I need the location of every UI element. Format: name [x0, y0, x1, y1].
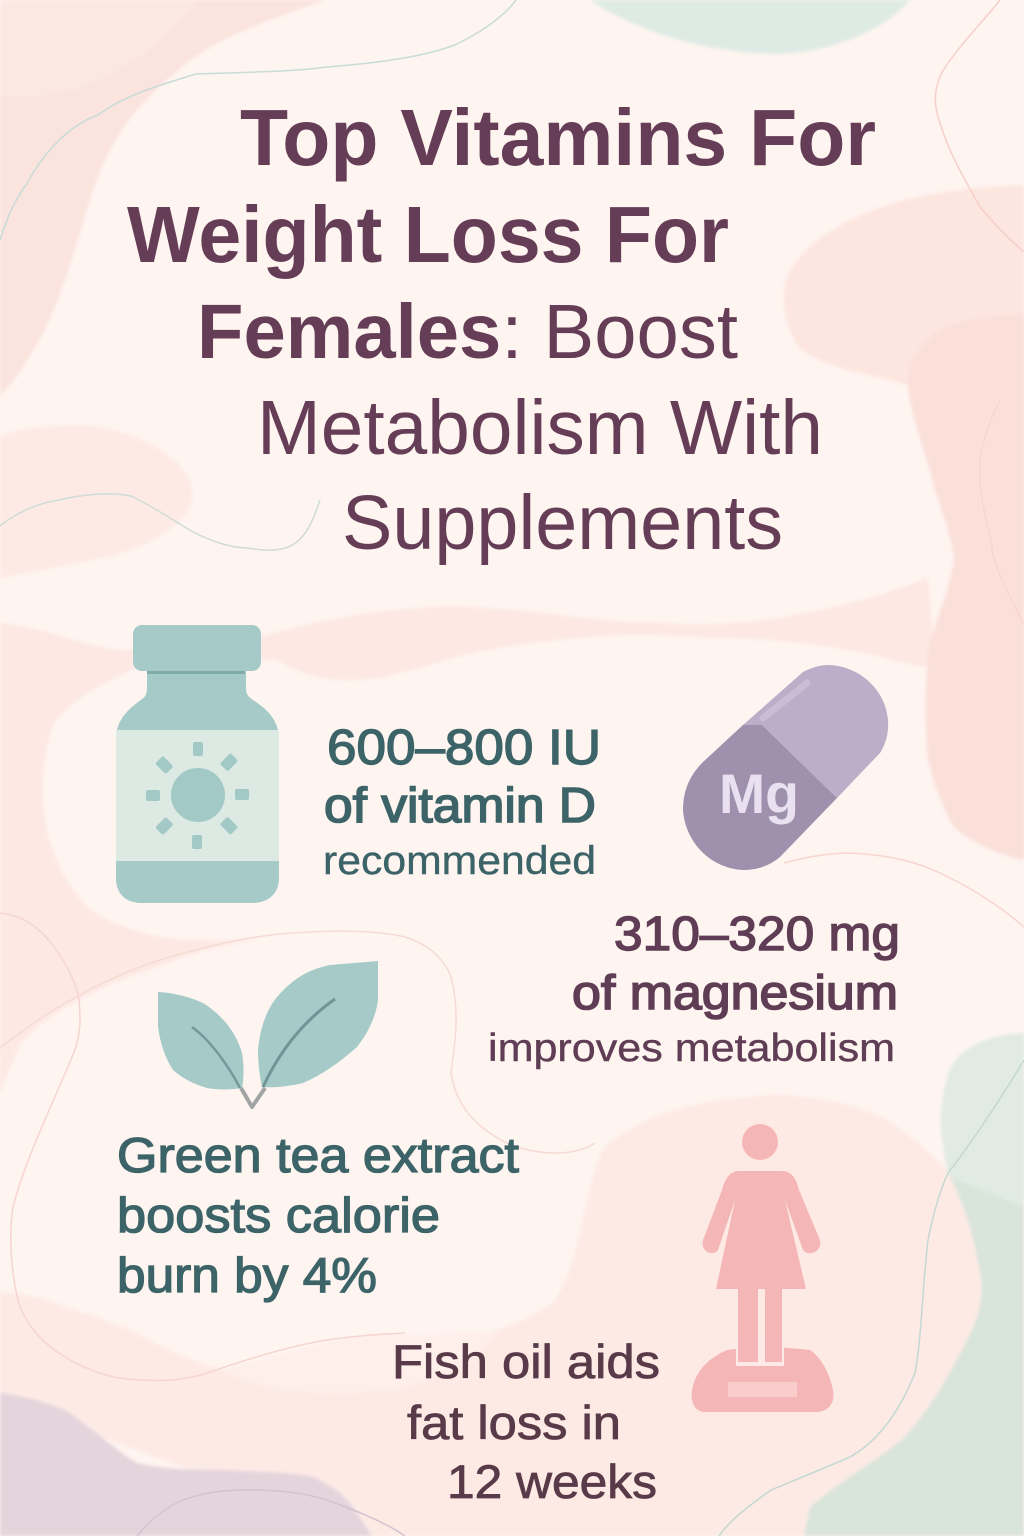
- text: green tea: Green tea extract: [117, 1129, 519, 1183]
- text: magnesium: improves metabolism: [488, 1027, 895, 1070]
- text: green tea: [117, 1129, 519, 1303]
- body: [703, 1171, 820, 1362]
- icon: vitamin D bottle: [116, 625, 279, 903]
- text: fish oil: [392, 1335, 660, 1508]
- title: [127, 93, 876, 566]
- text: green tea: burn by 4%: [117, 1249, 377, 1303]
- text: vitamin D: recommended: [323, 839, 596, 883]
- text: green tea: boosts calorie: [117, 1189, 440, 1243]
- text: fish oil: fat loss in: [407, 1396, 621, 1449]
- text: magnesium: of magnesium: [572, 967, 898, 1020]
- title: Females: Boost: [197, 289, 738, 375]
- text: vitamin D: of vitamin D: [324, 779, 596, 833]
- text: magnesium: 310–320 mg: [614, 908, 900, 961]
- scale: [692, 1347, 833, 1412]
- text: fish oil: 12 weeks: [447, 1455, 657, 1508]
- text: magnesium: [488, 908, 900, 1070]
- text: fish oil: Fish oil aids: [392, 1335, 660, 1388]
- title: Supplements: [342, 480, 783, 566]
- icon: magnesium capsule: [683, 665, 888, 870]
- title: Top Vitamins For: [240, 93, 876, 182]
- title: Weight Loss For: [127, 190, 729, 279]
- text: vitamin D: 600–800 IU: [327, 721, 601, 775]
- icon: green tea leaves: [158, 961, 378, 1107]
- icon: sun: [146, 742, 249, 849]
- text: vitamin D: [323, 721, 601, 883]
- title: Metabolism With: [257, 385, 823, 471]
- icon: woman on scale: [692, 1124, 833, 1412]
- capsule label: Mg: [719, 762, 799, 825]
- head: [742, 1124, 778, 1160]
